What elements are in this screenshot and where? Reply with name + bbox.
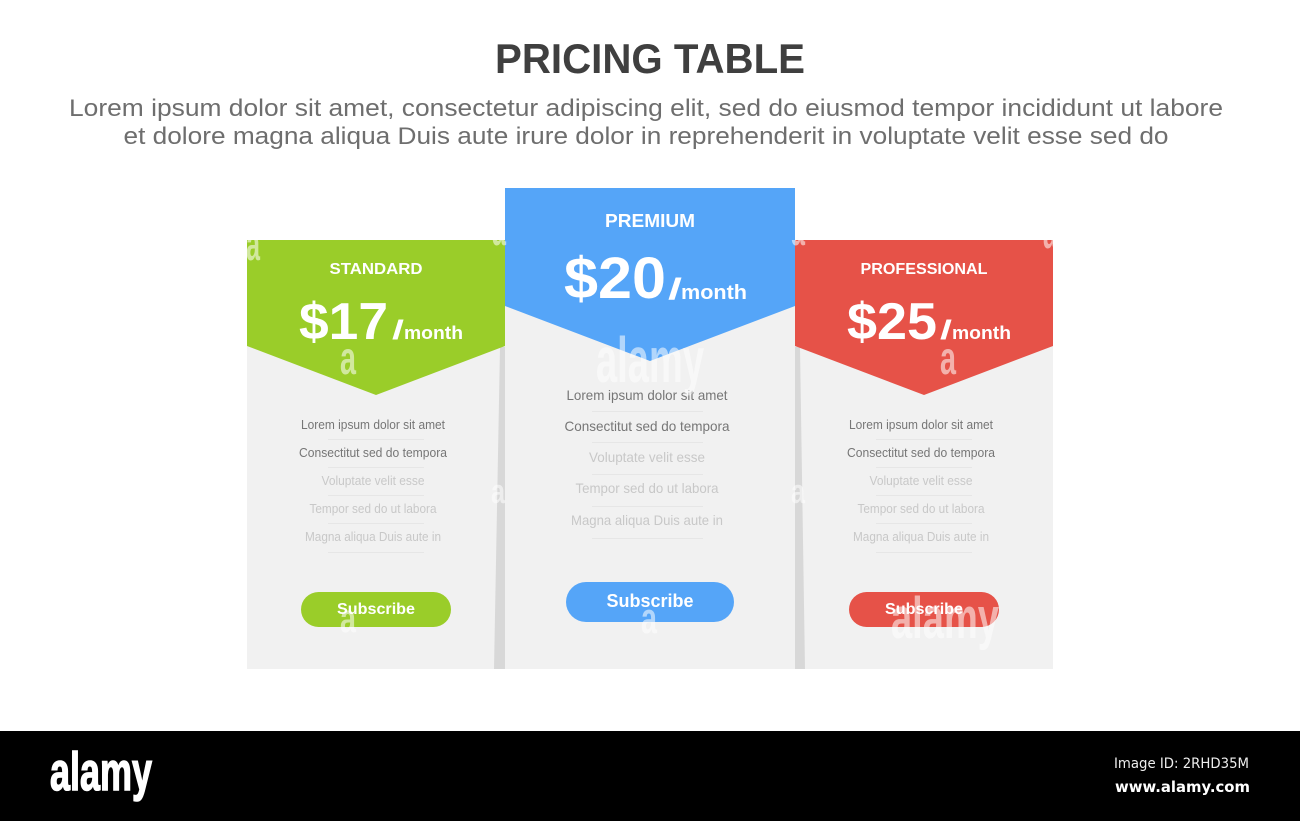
watermarks: a [791, 203, 805, 255]
feature list: standard: Consectitut sed do tempora [299, 446, 447, 460]
price: professional: $25 [847, 293, 937, 351]
price: professional: / [940, 315, 953, 345]
watermarks: alamy [596, 324, 704, 396]
feature list: standard: Tempor sed do ut labora [310, 502, 437, 516]
feature list: professional: Consectitut sed do tempora [847, 446, 995, 460]
subtitle text: et dolore magna aliqua Duis aute irure dolor in reprehenderit in voluptate velit esse sed do [124, 123, 1168, 150]
banner: professional [795, 240, 1053, 395]
panel: professional [795, 240, 1053, 669]
feature list: premium: Voluptate velit esse [589, 449, 705, 465]
feature list: professional: Magna aliqua Duis aute in [853, 530, 989, 544]
footer logo: alamy [50, 742, 152, 802]
feature list: premium: Magna aliqua Duis aute in [571, 512, 723, 528]
subscribe button: professional: Subscribe [885, 601, 963, 618]
feature list: standard: Lorem ipsum dolor sit amet [301, 418, 445, 432]
subscribe button: premium: Subscribe [606, 591, 694, 611]
subtitle text: Lorem ipsum dolor sit amet, consectetur adipiscing elit, sed do eiusmod tempor incididunt ut labore [69, 95, 1223, 122]
subscribe button: professional [849, 592, 999, 627]
watermarks: a [1043, 206, 1057, 258]
feature list: premium: Tempor sed do ut labora [576, 480, 719, 496]
watermarks: a [492, 203, 506, 255]
subscribe button: premium [566, 582, 734, 622]
price: standard: $17 [299, 293, 388, 351]
footer bar [0, 731, 1300, 821]
feature list: standard: Voluptate velit esse [322, 474, 425, 488]
feature list: premium: Lorem ipsum dolor sit amet [566, 387, 728, 403]
price: premium: month [681, 282, 747, 304]
watermarks: a [491, 473, 506, 511]
feature list: premium [564, 387, 730, 538]
price: premium: / [668, 273, 683, 306]
watermarks: a [940, 332, 956, 384]
image id: Image ID: 2RHD35M [1114, 756, 1249, 772]
watermarks: alamy [891, 586, 999, 651]
price: premium: $20 [564, 246, 666, 311]
feature list: professional: Voluptate velit esse [870, 474, 973, 488]
price: standard: month [404, 323, 463, 343]
feature list: professional [847, 418, 995, 552]
feature list: professional: Lorem ipsum dolor sit amet [849, 418, 993, 432]
watermarks: a [791, 473, 806, 511]
price: standard: / [392, 315, 405, 345]
subtitle text [69, 95, 1223, 150]
plan name: premium: PREMIUM [605, 211, 695, 231]
watermarks: a [641, 594, 657, 643]
banner: standard [247, 240, 505, 395]
feature list: standard: Magna aliqua Duis aute in [305, 530, 441, 544]
feature list: professional: Tempor sed do ut labora [858, 502, 985, 516]
plan name: standard: STANDARD [330, 261, 422, 278]
banner: premium [505, 188, 795, 361]
price: professional [847, 293, 1011, 351]
feature list: standard [299, 418, 447, 552]
subscribe button: standard: Subscribe [337, 601, 415, 618]
price: standard [299, 293, 463, 351]
price: professional: month [952, 323, 1011, 343]
website: www.alamy.com [1115, 778, 1250, 796]
watermarks: a [246, 218, 260, 270]
plan name: professional: PROFESSIONAL [860, 261, 988, 278]
price: premium [564, 246, 747, 311]
watermarks: a [340, 332, 356, 384]
watermarks: a [340, 597, 357, 641]
watermarks [247, 240, 1053, 627]
title: PRICING TABLE [495, 35, 805, 82]
panel: standard [247, 240, 505, 669]
feature list: premium: Consectitut sed do tempora [564, 418, 730, 434]
panel: premium [505, 188, 795, 669]
subscribe button: standard [301, 592, 451, 627]
